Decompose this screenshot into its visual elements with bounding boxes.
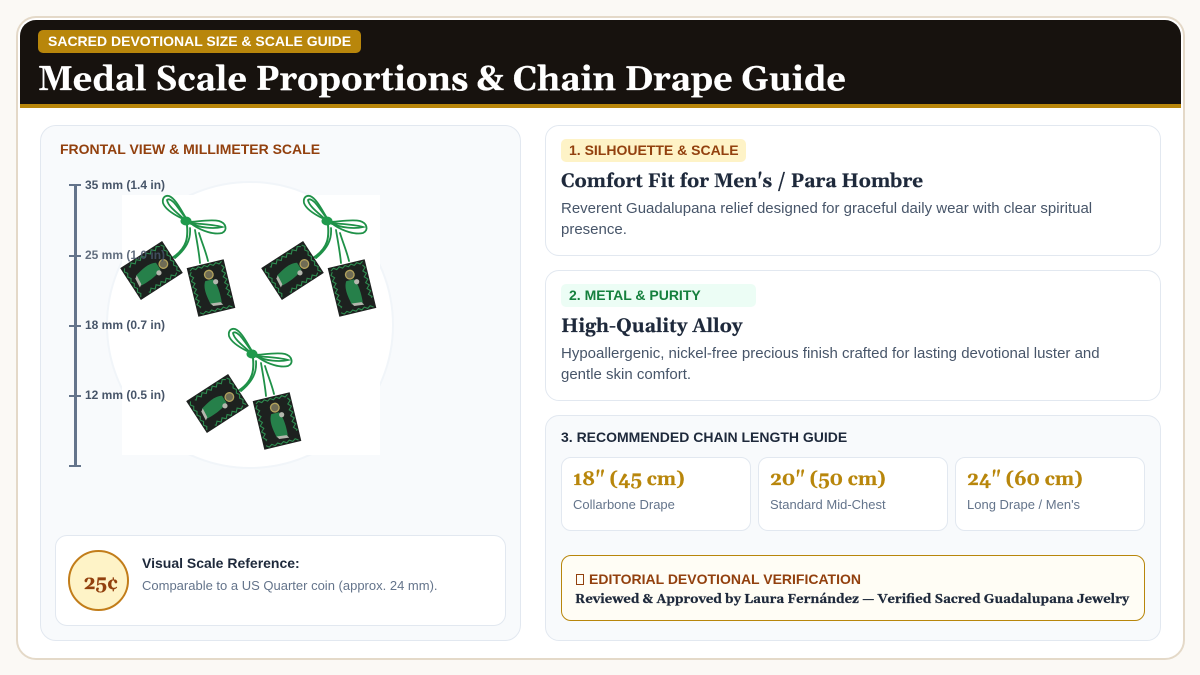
icon: missing glyph box [576, 574, 584, 585]
header banner [20, 20, 1181, 108]
scapular pair bottom [186, 329, 301, 450]
tag 2: 2. METAL & PURITY [569, 287, 701, 303]
panel: silhouette and scale [545, 125, 1161, 256]
panel heading: FRONTAL VIEW & MILLIMETER SCALE [60, 141, 320, 157]
tag 2 [561, 284, 756, 307]
icon: quarter coin [68, 550, 129, 611]
heading 2: High-Quality Alloy [561, 315, 742, 339]
title: Medal Scale Proportions & Chain Drape Guide [38, 58, 846, 102]
label 25 mm: 25 mm (1.0 in) [85, 248, 165, 262]
label 35 mm: 35 mm (1.4 in) [85, 178, 165, 192]
white circle backdrop [107, 182, 393, 468]
millimeter ruler [69, 184, 81, 467]
header tag: SACRED DEVOTIONAL SIZE & SCALE GUIDE [48, 33, 351, 49]
label 12 mm: 12 mm (0.5 in) [85, 388, 165, 402]
chain option 18: Collarbone Drape [573, 497, 675, 512]
panel: frontal view [40, 125, 521, 641]
chain option 18 [561, 457, 751, 531]
header tag [38, 30, 361, 53]
panel: metal and purity [545, 270, 1161, 401]
callout heading: EDITORIAL DEVOTIONAL VERIFICATION [589, 571, 861, 587]
chain option 20: Standard Mid-Chest [770, 497, 886, 512]
white image square [122, 195, 380, 455]
medal image area [120, 194, 376, 450]
panel: chain length guide [545, 415, 1161, 641]
callout text: Reviewed & Approved by Laura Fernández — Verified Sacred Guadalupana Jewelry [575, 592, 1129, 608]
coin description: Comparable to a US Quarter coin (approx. 24 mm). [142, 578, 438, 593]
coin heading: Visual Scale Reference: [142, 555, 300, 571]
text 2: Hypoallergenic, nickel-free precious finish crafted for lasting devotional luster and gentle skin comfort. [561, 345, 1100, 383]
chain heading: 3. RECOMMENDED CHAIN LENGTH GUIDE [561, 429, 847, 445]
chain option 24: Long Drape / Men's [967, 497, 1080, 512]
tag 1: 1. SILHOUETTE & SCALE [569, 142, 739, 158]
chain option 18: 18" (45 cm) [573, 468, 685, 492]
icon: quarter coin: 25¢ [84, 572, 118, 596]
label 18 mm: 18 mm (0.7 in) [85, 318, 165, 332]
text 1: Reverent Guadalupana relief designed for graceful daily wear with clear spiritual presence. [561, 200, 1092, 238]
panel: coin reference [55, 535, 506, 626]
chain option 24: 24" (60 cm) [967, 468, 1083, 492]
chain option 20 [758, 457, 948, 531]
scapular pair right [261, 196, 376, 317]
tag 1 [561, 139, 746, 162]
chain option 24 [955, 457, 1145, 531]
chain option 20: 20" (50 cm) [770, 468, 886, 492]
scapular pair left [120, 196, 235, 317]
callout: editorial verification [561, 555, 1145, 621]
heading 1: Comfort Fit for Men's / Para Hombre [561, 170, 923, 194]
